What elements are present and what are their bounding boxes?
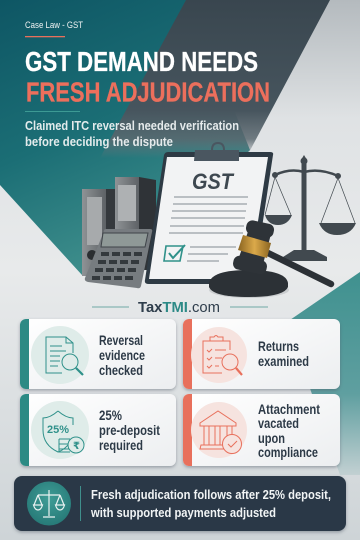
- footer text: [90, 487, 331, 520]
- illustration: gavel: [209, 219, 331, 298]
- logo: TaxTMI.com: TaxTMI.com: [138, 299, 220, 316]
- card text: Returns: [258, 338, 299, 354]
- card text: evidence: [99, 347, 145, 363]
- subtitle: Claimed ITC reversal needed verification: [25, 118, 239, 133]
- illustration: clipboard: [145, 143, 273, 284]
- icon: shield with coins: ₹: [73, 441, 80, 452]
- card text: [99, 407, 160, 453]
- eyebrow underline: [25, 36, 65, 37]
- card text: checked: [99, 362, 143, 378]
- icon: scales badge: [27, 482, 71, 526]
- card text: upon: [258, 431, 285, 446]
- icon: checklist with magnifier: [191, 327, 247, 383]
- card text: [99, 332, 145, 378]
- card text: Attachment: [258, 402, 320, 417]
- card text: [258, 402, 320, 460]
- GST label on clipboard: GST: [192, 169, 234, 194]
- card: attachment vacated: [183, 394, 340, 466]
- title: [25, 46, 270, 108]
- card text: vacated: [258, 416, 299, 431]
- card text: pre-deposit: [99, 422, 160, 438]
- title: FRESH ADJUDICATION: [26, 76, 270, 108]
- subtitle: [25, 111, 239, 149]
- card: reversal evidence: [20, 319, 176, 389]
- card text: compliance: [258, 445, 318, 460]
- icon: institution with check: [191, 402, 247, 458]
- eyebrow label: Case Law - GST: [25, 20, 83, 31]
- illustration: scales: [265, 155, 356, 261]
- card text: required: [99, 437, 143, 453]
- illustration: calculator: [85, 229, 152, 288]
- card text: 25%: [99, 407, 122, 423]
- footer banner: [14, 476, 346, 531]
- card: pre-deposit: [20, 394, 176, 466]
- card text: Reversal: [99, 332, 143, 348]
- footer text: with supported payments adjusted: [90, 505, 276, 520]
- subtitle: before deciding the dispute: [25, 134, 173, 149]
- icon: document with magnifier: [31, 326, 89, 384]
- title: GST DEMAND NEEDS: [25, 46, 258, 77]
- icon: shield with coins: 25%: [47, 424, 69, 436]
- icon: shield with coins: [31, 401, 89, 459]
- card text: [258, 338, 309, 369]
- illustration: binders: [82, 177, 156, 276]
- card text: examined: [258, 353, 309, 369]
- card: returns examined: [183, 319, 340, 389]
